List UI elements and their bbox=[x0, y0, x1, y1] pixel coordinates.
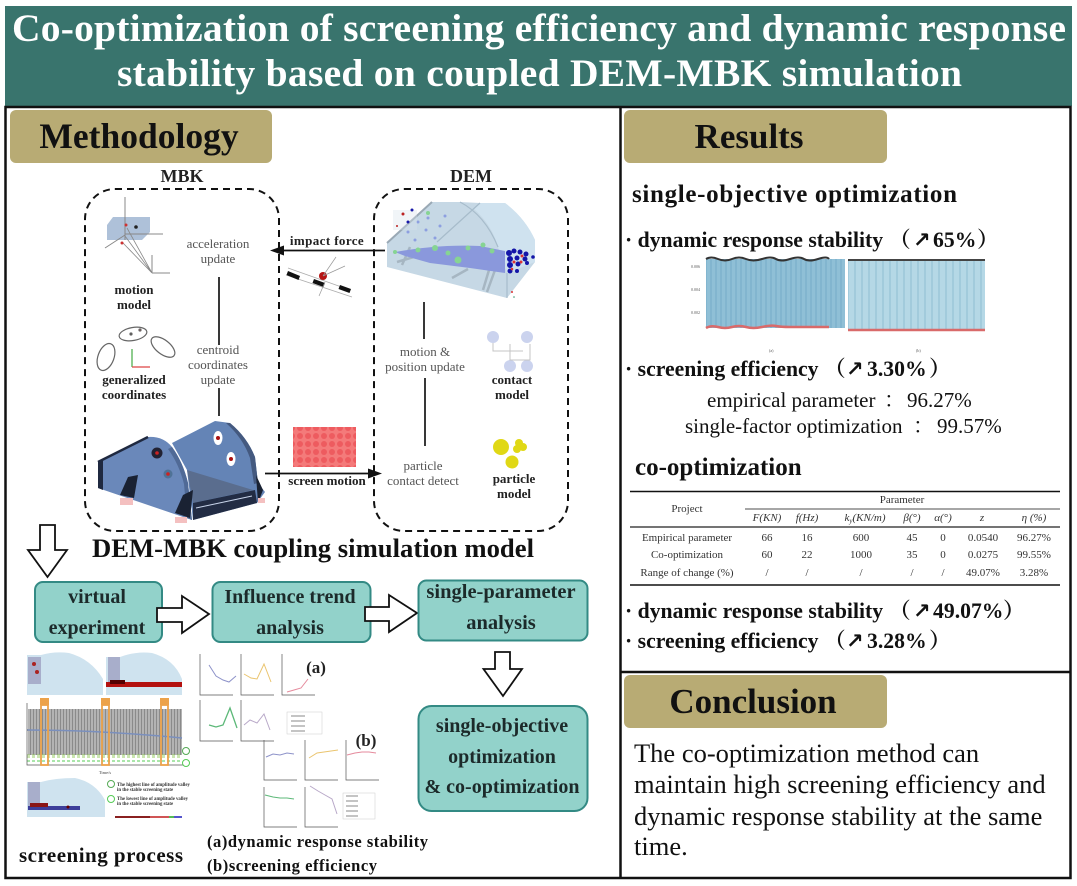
title banner: stability based on coupled DEM-MBK simulation bbox=[117, 51, 962, 95]
chart (b): (b) bbox=[916, 348, 921, 353]
label: centroid coordinates update: coordinates bbox=[188, 357, 248, 372]
DEM panel: DEM bbox=[450, 166, 492, 186]
parameter table: 1000 bbox=[850, 549, 872, 561]
result: dynamic response stability 65%: ） bbox=[977, 228, 999, 252]
single-factor optimization value: ： bbox=[913, 414, 934, 438]
icon: contact model bbox=[487, 331, 533, 372]
parameter table: 0 bbox=[940, 549, 946, 561]
single-factor optimization value: single-factor optimization bbox=[685, 414, 903, 438]
parameter table: f(Hz) bbox=[796, 512, 819, 524]
chart group (a) bbox=[200, 654, 326, 741]
chart (a): 0.006 bbox=[691, 264, 700, 269]
parameter table: Parameter bbox=[880, 494, 925, 506]
parameter table: 0.0540 bbox=[968, 532, 999, 544]
chart (a): 0.004 bbox=[691, 287, 700, 292]
empirical parameter value: 96.27% bbox=[907, 388, 972, 412]
conclusion text: dynamic response stability at the same bbox=[634, 801, 1042, 831]
chart legend bbox=[108, 780, 190, 817]
MBK panel: MBK bbox=[160, 166, 204, 186]
result: screening efficiency 3.30%: ↗ bbox=[846, 357, 864, 381]
result: dynamic response stability 49.07%: （ bbox=[889, 599, 911, 623]
chart legend: in the stable screening state bbox=[117, 788, 173, 793]
caption: charts legend: (b)screening efficiency bbox=[207, 856, 378, 875]
parameter table: (KN/m) bbox=[852, 512, 886, 524]
subheading: single-objective optimization: single-objective optimization bbox=[632, 181, 957, 208]
chart legend: in the stable screening state bbox=[117, 802, 173, 807]
box: influence trend analysis bbox=[212, 582, 370, 642]
label: particle model: particle bbox=[493, 471, 536, 486]
icon: generalized coordinates bbox=[94, 325, 178, 373]
parameter table: η (%) bbox=[1022, 512, 1047, 524]
chart group (b) bbox=[264, 731, 379, 827]
conclusion heading bbox=[624, 675, 887, 728]
arrow: down to optimization bbox=[484, 652, 522, 696]
parameter table: Project bbox=[671, 503, 703, 515]
figure: screening process bbox=[19, 652, 190, 867]
stability charts bbox=[691, 258, 985, 353]
result: screening efficiency 3.28%: ） bbox=[929, 629, 951, 653]
results heading bbox=[624, 110, 887, 163]
label: generalized coordinates: generalized bbox=[102, 372, 167, 387]
result: dynamic response stability 49.07%: ） bbox=[1003, 599, 1025, 623]
figure: parameter influence charts bbox=[200, 654, 429, 875]
parameter table: Co-optimization bbox=[651, 549, 724, 561]
label: particle model: model bbox=[497, 486, 531, 501]
chart (b) bbox=[848, 259, 985, 353]
caption: charts legend bbox=[207, 832, 429, 875]
parameter table: / bbox=[859, 567, 863, 579]
label: centroid coordinates update: update bbox=[201, 372, 236, 387]
chart legend: The lowest line of amplitude valley bbox=[117, 797, 189, 802]
parameter table: Range of change (%) bbox=[640, 567, 734, 579]
chart (a): (a) bbox=[769, 348, 774, 353]
arrow: down to virtual experiment bbox=[28, 525, 67, 577]
icon: screen motion bbox=[293, 427, 356, 467]
box: single-parameter analysis bbox=[418, 580, 588, 640]
conclusion text: time. bbox=[634, 831, 688, 861]
result: dynamic response stability 65%: · dynamic response stability bbox=[625, 228, 883, 252]
parameter table: 0.0275 bbox=[968, 549, 999, 561]
parameter table: 49.07% bbox=[966, 567, 1000, 579]
arrow: to influence trend bbox=[157, 596, 209, 633]
result: screening efficiency 3.30%: ） bbox=[929, 357, 951, 381]
result: screening efficiency 3.28%: 3.28% bbox=[867, 629, 927, 653]
screen snapshot top left bbox=[27, 652, 103, 695]
parameter table: / bbox=[765, 567, 769, 579]
title banner bbox=[5, 6, 1072, 106]
screen snapshot bottom bbox=[27, 778, 105, 817]
result: screening efficiency 3.30%: （ bbox=[824, 357, 846, 381]
conclusion text: The co-optimization method can bbox=[634, 738, 979, 768]
parameter table: z bbox=[979, 512, 985, 524]
label: motion and position update: position update bbox=[385, 359, 465, 374]
label: acceleration update: update bbox=[201, 251, 236, 266]
label: centroid coordinates update: centroid bbox=[197, 342, 240, 357]
parameter table: 3.28% bbox=[1020, 567, 1048, 579]
icon: particle model bbox=[493, 439, 527, 468]
label: motion and position update: motion & bbox=[400, 344, 450, 359]
label: particle contact detect: contact detect bbox=[387, 473, 459, 488]
parameter table: 16 bbox=[802, 532, 813, 544]
box: virtual experiment bbox=[35, 582, 162, 642]
parameter table: β(°) bbox=[902, 512, 921, 524]
box: single-objective and co-optimization bbox=[418, 706, 588, 811]
box: virtual experiment: virtual bbox=[68, 586, 126, 608]
arrow: screen motion bbox=[265, 468, 382, 478]
parameter table: / bbox=[941, 567, 945, 579]
box: single-parameter analysis: analysis bbox=[466, 612, 536, 634]
methodology heading: Methodology bbox=[39, 116, 239, 156]
result: screening efficiency 3.30%: 3.30% bbox=[867, 357, 927, 381]
chart (a): 0.002 bbox=[691, 310, 700, 315]
box: single-parameter analysis: single-parameter bbox=[426, 581, 576, 603]
label: motion model: model bbox=[117, 297, 151, 312]
label: generalized coordinates: coordinates bbox=[102, 387, 166, 402]
parameter table: k bbox=[844, 512, 849, 524]
box: single-objective and co-optimization: & co-optimization bbox=[425, 776, 579, 798]
parameter table: / bbox=[910, 567, 914, 579]
box: single-objective and co-optimization: optimization bbox=[448, 746, 556, 768]
arrow: to single-parameter bbox=[365, 595, 417, 632]
result: dynamic response stability 49.07%: · dynamic response stability bbox=[625, 599, 883, 623]
chart (a) bbox=[691, 258, 845, 353]
screen snapshot top right bbox=[106, 652, 182, 695]
results heading: Results bbox=[695, 117, 803, 156]
label: impact force: impact force bbox=[290, 233, 364, 248]
subheading: co-optimization: co-optimization bbox=[635, 454, 802, 481]
box: influence trend analysis: analysis bbox=[256, 617, 324, 639]
time history chart: Time/s bbox=[99, 770, 111, 775]
label: screen motion: screen motion bbox=[288, 473, 366, 488]
parameter table: 45 bbox=[906, 532, 918, 544]
parameter table: 96.27% bbox=[1017, 532, 1051, 544]
caption: charts legend: (a)dynamic response stability bbox=[207, 832, 429, 851]
result: dynamic response stability 65%: ↗ bbox=[913, 228, 931, 252]
box: single-objective and co-optimization: single-objective bbox=[436, 715, 568, 737]
parameter table: α(°) bbox=[934, 512, 952, 524]
time history chart bbox=[27, 698, 190, 775]
label: acceleration update: acceleration bbox=[187, 236, 250, 251]
result: dynamic response stability 65%: （ bbox=[889, 228, 911, 252]
result: screening efficiency 3.30%: · screening efficiency bbox=[625, 357, 819, 381]
result: screening efficiency 3.28%: · screening efficiency bbox=[625, 629, 819, 653]
conclusion text: maintain high screening efficiency and bbox=[634, 769, 1046, 799]
link line bbox=[218, 388, 220, 416]
title banner: Co-optimization of screening efficiency and dynamic response bbox=[12, 6, 1066, 50]
parameter table: 0 bbox=[940, 532, 946, 544]
coupling diagram bbox=[85, 166, 568, 531]
chart legend: The highest line of amplitude valley bbox=[117, 783, 190, 788]
parameter table: 99.55% bbox=[1017, 549, 1051, 561]
icon: DEM screen with particles bbox=[387, 202, 535, 298]
MBK panel bbox=[85, 166, 279, 531]
empirical parameter value: empirical parameter bbox=[707, 388, 875, 412]
result: dynamic response stability 65%: 65% bbox=[933, 228, 976, 252]
result: screening efficiency 3.28%: ↗ bbox=[846, 629, 864, 653]
arrow: impact force bbox=[270, 246, 385, 256]
chart group (b): (b) bbox=[356, 731, 376, 750]
icon: screen machine bbox=[98, 421, 265, 523]
parameter table: 60 bbox=[762, 549, 773, 561]
diagram caption: DEM-MBK coupling simulation model bbox=[92, 534, 534, 563]
link line bbox=[218, 277, 220, 345]
parameter table: 66 bbox=[762, 532, 773, 544]
parameter table bbox=[630, 492, 1060, 585]
result: dynamic response stability 49.07%: 49.07% bbox=[933, 599, 1003, 623]
box: virtual experiment: experiment bbox=[49, 617, 146, 639]
parameter table: 22 bbox=[802, 549, 812, 561]
parameter table: F(KN) bbox=[752, 512, 782, 524]
label: contact model: contact bbox=[492, 372, 533, 387]
link line bbox=[424, 378, 426, 446]
label: motion model: motion bbox=[114, 282, 154, 297]
chart group (a): (a) bbox=[306, 658, 326, 677]
single-factor optimization value: 99.57% bbox=[937, 414, 1002, 438]
box: influence trend analysis: Influence trend bbox=[224, 586, 356, 608]
label: contact model: model bbox=[495, 387, 529, 402]
parameter table: Empirical parameter bbox=[642, 532, 732, 544]
result: dynamic response stability 49.07%: ↗ bbox=[913, 599, 931, 623]
parameter table: 600 bbox=[853, 532, 870, 544]
parameter table: 35 bbox=[906, 549, 918, 561]
result: screening efficiency 3.28%: （ bbox=[824, 629, 846, 653]
link line bbox=[423, 302, 425, 339]
parameter table: y bbox=[848, 517, 853, 525]
icon: motion model bbox=[105, 197, 170, 273]
caption: screening process: screening process bbox=[19, 843, 183, 867]
parameter table: / bbox=[805, 567, 809, 579]
methodology heading bbox=[10, 110, 272, 163]
DEM panel bbox=[374, 166, 568, 531]
label: particle contact detect: particle bbox=[404, 458, 443, 473]
empirical parameter value: ： bbox=[884, 388, 905, 412]
conclusion heading: Conclusion bbox=[669, 682, 837, 721]
icon: flexible link detail bbox=[286, 257, 352, 297]
